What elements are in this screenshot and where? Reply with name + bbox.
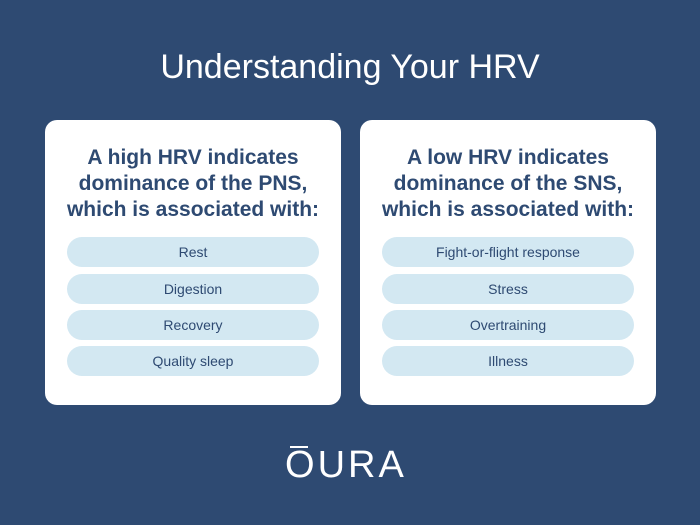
pill: rest xyxy=(67,237,319,267)
heading: high HRV: A high HRV indicates xyxy=(87,146,299,169)
pill: digestion xyxy=(67,274,319,304)
pill: fight-or-flight: Fight-or-flight response xyxy=(436,244,580,260)
pill: recovery: Recovery xyxy=(163,317,223,333)
heading: high HRV: which is associated with: xyxy=(67,198,319,221)
pill: illness: Illness xyxy=(488,353,528,369)
panel: low HRV xyxy=(360,120,656,405)
pill: recovery xyxy=(67,310,319,340)
heading: low HRV: which is associated with: xyxy=(382,198,634,221)
heading: high HRV xyxy=(67,146,319,221)
pill: overtraining: Overtraining xyxy=(470,317,546,333)
pill: quality sleep xyxy=(67,346,319,376)
heading: high HRV: dominance of the PNS, xyxy=(79,172,307,195)
heading: low HRV: dominance of the SNS, xyxy=(394,172,622,195)
pill: digestion: Digestion xyxy=(164,281,222,297)
pill: fight-or-flight xyxy=(382,237,634,267)
heading: low HRV: A low HRV indicates xyxy=(407,146,609,169)
pill: overtraining xyxy=(382,310,634,340)
pill: stress xyxy=(382,274,634,304)
pill: illness xyxy=(382,346,634,376)
title: Understanding Your HRV xyxy=(160,48,540,86)
heading: low HRV xyxy=(382,146,634,221)
pill: rest: Rest xyxy=(179,244,207,260)
pill: quality sleep: Quality sleep xyxy=(153,353,233,369)
pill: stress: Stress xyxy=(488,281,528,297)
panel: high HRV xyxy=(45,120,341,405)
logo: OURA: OURA xyxy=(285,444,407,486)
